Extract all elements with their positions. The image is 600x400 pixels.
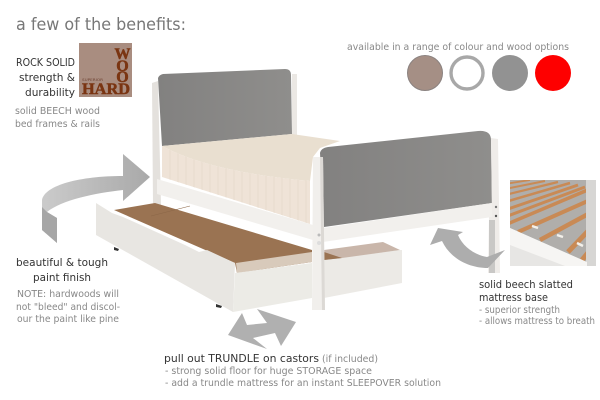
text block: trundle: - add a trundle mattress for an instant SLEEPOVER solution — [165, 378, 441, 389]
text block: paint finish — [16, 257, 120, 325]
text block: paint finish: NOTE: hardwoods will — [17, 289, 119, 300]
icon: wood hard badge: HARD — [82, 81, 130, 98]
icon: wood hard badge: SUPERIOR — [82, 78, 104, 82]
text block: rock solid — [16, 57, 75, 99]
text block: slatted base: solid beech slatted — [479, 279, 573, 291]
text block: paint finish: not "bleed" and discol- — [16, 302, 120, 313]
foot panel — [320, 131, 492, 227]
arrow: curved right — [430, 228, 505, 268]
foot back post — [488, 138, 500, 273]
back right post — [292, 74, 297, 135]
icon: wood hard badge — [79, 43, 132, 98]
trundle inner wall — [236, 252, 312, 273]
text block: slatted base: - superior strength — [479, 305, 560, 316]
mattress side — [160, 145, 312, 225]
side rail — [157, 179, 313, 240]
text block: solid beech frames: solid BEECH wood — [15, 106, 100, 117]
icon: wood hard badge: O — [116, 69, 129, 86]
text block: rock solid: durability — [25, 87, 75, 99]
icon: wood hard badge: O — [116, 58, 129, 75]
text block: slatted base: mattress base — [479, 292, 548, 304]
trundle front — [233, 263, 312, 312]
text block: trundle: (if included) — [322, 354, 378, 365]
text block: paint finish: our the paint like pine — [17, 314, 119, 325]
bed illustration — [96, 69, 500, 312]
foot front post — [312, 157, 325, 310]
text block: solid beech frames: bed frames & rails — [15, 119, 100, 130]
text block: paint finish: beautiful & tough — [16, 257, 108, 269]
arrow: curved left — [42, 154, 150, 243]
text block: rock solid: ROCK SOLID — [16, 57, 75, 69]
colour swatches — [408, 55, 571, 91]
text block: trundle: pull out TRUNDLE on castors — [164, 353, 319, 365]
text block: trundle — [164, 353, 441, 389]
trundle right — [324, 250, 402, 298]
trundle side — [96, 203, 235, 312]
text block: slatted base — [479, 279, 595, 327]
icon: wood hard badge: W — [114, 46, 130, 63]
text block: rock solid: strength & — [19, 72, 75, 84]
mattress top — [162, 134, 340, 181]
text block: trundle: - strong solid floor for huge STORAGE space — [165, 366, 372, 377]
text block: paint finish: paint finish — [33, 272, 91, 284]
text: colour options: available in a range of colour and wood options — [347, 42, 569, 53]
title: a few of the benefits: — [16, 15, 186, 34]
trundle interior — [114, 203, 312, 273]
headboard panel — [158, 69, 292, 146]
text block: solid beech frames — [15, 106, 100, 130]
castors — [114, 247, 222, 308]
slats photo — [505, 180, 596, 266]
foot rail — [323, 203, 492, 242]
arrow: double trundle — [228, 309, 296, 349]
back left post — [152, 81, 161, 205]
